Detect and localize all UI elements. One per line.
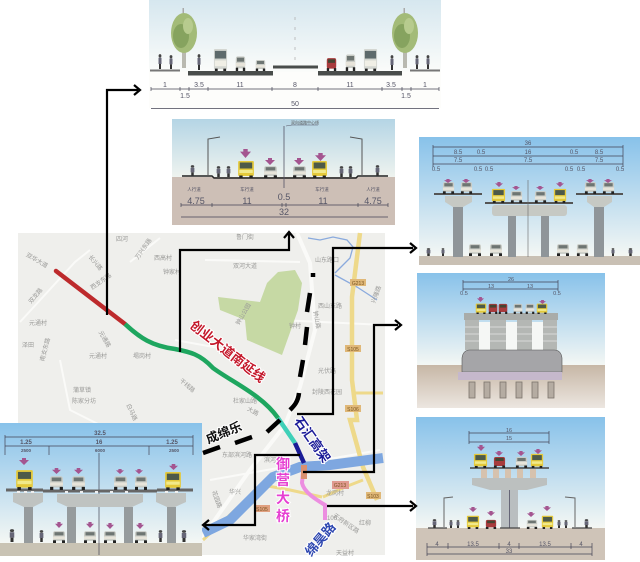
map place names: 元通路 <box>97 329 113 349</box>
dashed black rail line <box>203 273 313 453</box>
pedestrians <box>158 54 430 70</box>
centre line <box>284 119 319 188</box>
piers <box>24 507 176 543</box>
map place names: 山东路口 <box>315 256 339 264</box>
road shields: G213 <box>352 281 364 287</box>
map place names: 西山东路 <box>318 302 342 310</box>
dimensions: 7.5 <box>454 158 463 164</box>
map place names: 陈家分坊 <box>72 397 96 405</box>
dimensions: 16 <box>525 150 532 156</box>
dimensions top: 15 <box>506 436 512 442</box>
dimensions bottom: 4 <box>579 542 583 548</box>
panel: top road section <box>149 0 441 108</box>
dimensions: 7.5 <box>595 158 604 164</box>
vehicles <box>214 49 377 71</box>
dimensions: 人行道 <box>366 186 380 193</box>
expressway yellow roads <box>203 233 383 540</box>
label: bridge <box>276 456 290 524</box>
map place names: 光伏路 <box>318 367 336 375</box>
dimensions: 0.5 <box>570 150 579 156</box>
map place names: 兴隆路 <box>369 284 383 304</box>
dimensions: 人行道 <box>187 186 201 193</box>
columns <box>465 320 557 350</box>
dimensions: 7.5 <box>524 158 533 164</box>
label: bridge: 御 <box>276 456 290 472</box>
dimension lines: 3.5 <box>386 82 396 89</box>
pedestrians <box>191 165 379 177</box>
dimensions top: 16 <box>506 428 512 434</box>
map place names: 元通村 <box>29 319 47 327</box>
dimension lines: 1 <box>163 82 167 89</box>
label: bridge: 营 <box>276 472 290 488</box>
dimension lines: 11 <box>346 82 354 89</box>
dimensions: 0.5 <box>565 167 574 173</box>
dimensions: 车行道 <box>315 186 329 193</box>
dimensions: 0.5 <box>553 291 561 297</box>
dimensions <box>5 431 193 555</box>
dimensions: 8.5 <box>595 150 604 156</box>
lamps <box>444 497 575 527</box>
dimensions <box>460 277 561 297</box>
road deck line <box>182 176 388 178</box>
map place names: 天府新区路 <box>332 511 361 535</box>
dimensions: 11 <box>242 196 252 206</box>
panel: elevated section with side ramps <box>419 137 640 265</box>
dimensions: 1.25 <box>166 440 178 446</box>
dimensions: 36 <box>525 141 532 147</box>
green park area <box>218 270 302 355</box>
map place names: 东部滨河路 <box>222 451 252 459</box>
map place names: 干线路 <box>178 377 197 394</box>
dimensions: 0.5 <box>616 167 625 173</box>
map place names: 大路 <box>246 405 260 418</box>
lower vehicles <box>433 506 588 529</box>
upper vehicles <box>16 458 181 490</box>
dimension lines: 1.5 <box>401 93 411 100</box>
dimension lines: 1.5 <box>180 93 190 100</box>
lower vehicles <box>10 522 186 543</box>
panel: bottom-left elevated section <box>0 423 202 556</box>
map place names: 钟山公园 <box>234 302 253 326</box>
dimensions bottom <box>427 542 592 556</box>
dimensions: 0.5 <box>432 167 441 173</box>
base <box>462 350 562 372</box>
dimension lines: 11 <box>236 82 244 89</box>
map place names: 龙岗村 <box>326 489 344 497</box>
map place names: 四河 <box>116 235 128 243</box>
map place names: 封陵西花园 <box>312 388 342 396</box>
dimensions: 11 <box>318 196 328 206</box>
dimensions: 1.25 <box>20 440 32 446</box>
dimensions: 26 <box>508 277 514 283</box>
dimensions bottom: 4 <box>507 542 511 548</box>
map place names: 西高村 <box>154 254 172 262</box>
map place names: 杜家山路 <box>233 397 257 405</box>
road shields: S105 <box>256 507 268 513</box>
map place names: 长兴路 <box>87 253 104 272</box>
map place names: 西支东路 <box>89 271 113 292</box>
dimensions: 0.5 <box>474 167 483 173</box>
dimensions bottom: 33 <box>506 549 513 555</box>
dimensions: 32.5 <box>94 431 106 437</box>
dimensions: 0.5 <box>460 291 468 297</box>
map place names: 天益村 <box>336 549 354 557</box>
dimensions <box>181 186 388 217</box>
dimension lines: 1 <box>423 82 427 89</box>
map place names: 双河大道 <box>233 262 257 270</box>
cap beam <box>472 478 547 490</box>
panel: double-deck viaduct section <box>416 417 605 560</box>
road shields: S105 <box>347 347 359 353</box>
map place names: 红柳 <box>359 519 371 527</box>
icon: right tree <box>392 8 418 68</box>
arrow: to double-deck section <box>327 501 416 511</box>
dimensions bottom: 13.5 <box>539 542 551 548</box>
map place names: 滨河 <box>264 456 276 464</box>
map place names: 泽田 <box>22 341 34 349</box>
dimensions: 0.5 <box>577 167 586 173</box>
panel: at-grade section <box>172 119 395 225</box>
dimensions: 2500 <box>169 448 180 453</box>
caps <box>13 493 186 507</box>
label: bridge: 大 <box>276 490 290 506</box>
route: dark blue section <box>295 443 304 463</box>
map place names: 蒲草镇 <box>73 386 91 394</box>
dimensions: 4.75 <box>187 196 205 206</box>
map place names: 白马路 <box>124 402 139 422</box>
dimensions: 13 <box>488 284 494 290</box>
label: connecting road: 绵昊路 <box>302 520 339 559</box>
map place names: 钟家村 <box>163 268 181 276</box>
dimensions: 32 <box>279 207 289 217</box>
icon: left tree <box>171 8 197 68</box>
upper vehicles <box>474 445 543 468</box>
map place names: 钟村 <box>289 322 301 330</box>
map place names: 双华大道 <box>25 251 49 270</box>
road shields: S106 <box>347 407 359 413</box>
dimensions: 0.5 <box>278 192 290 202</box>
dimensions: 0.5 <box>485 167 494 173</box>
map place names: 元通村 <box>89 352 107 360</box>
map place names: 双龙路 <box>27 286 44 305</box>
road shields: G213 <box>334 483 346 489</box>
map place names: 华兴 <box>229 488 241 496</box>
map place names <box>22 233 383 557</box>
map place names: S106 <box>323 516 338 522</box>
label: railway: 成绵乐 <box>204 418 244 447</box>
map place names: 鲁门街 <box>236 233 254 241</box>
dimensions: 0.5 <box>477 150 486 156</box>
dimensions: 2500 <box>21 448 32 453</box>
map place names: 钟山路 <box>311 310 322 329</box>
vehicles lower <box>427 244 632 256</box>
river <box>203 458 383 533</box>
arrow: to top section <box>107 85 140 315</box>
column <box>501 489 518 528</box>
dimension lines: 3.5 <box>194 82 204 89</box>
route: red section <box>56 271 125 324</box>
stream <box>308 237 377 300</box>
decks <box>6 490 193 491</box>
dimensions <box>432 141 625 173</box>
dimensions: 8.5 <box>454 150 463 156</box>
dimension lines: 8 <box>293 82 297 89</box>
label: elevated road: 石汇高架 <box>291 414 333 465</box>
road surface <box>150 66 440 76</box>
arrow: to elevated section <box>297 243 416 414</box>
vehicles upper <box>443 179 614 203</box>
vehicles and arrows <box>238 149 327 178</box>
arrow: to bottom-left section <box>203 455 300 530</box>
dimensions: 13 <box>527 284 533 290</box>
panel: tunnel-style box section <box>417 273 605 408</box>
arrow: to box section <box>303 320 401 472</box>
label: bridge: 桥 <box>276 508 290 524</box>
dimensions: 6000 <box>95 448 106 453</box>
route: pink section <box>302 472 325 520</box>
panel: road plan map <box>18 233 385 559</box>
dimensions bottom: 4 <box>435 542 439 548</box>
dimension lines: 50 <box>291 101 299 108</box>
map place names: 埸岗村 <box>133 352 151 360</box>
structure: piers and decks <box>453 206 604 257</box>
dimensions top <box>469 428 549 444</box>
supports <box>481 469 536 478</box>
dimensions: 车行道 <box>240 186 254 193</box>
dimension lines <box>151 82 439 108</box>
arrow: to at-grade section <box>180 232 294 352</box>
road shields: S103 <box>367 494 379 500</box>
map place names: 万兴东路 <box>133 237 154 261</box>
bridge mark <box>301 465 307 479</box>
road shields <box>254 279 381 513</box>
dimensions: 4.75 <box>364 196 382 206</box>
map place names: 华家湾街 <box>243 534 267 542</box>
label: road name: 创业大道南延线 <box>187 317 268 385</box>
map place names: 花园路 <box>210 489 224 509</box>
map place names: 南支东路 <box>38 337 52 362</box>
route: green section <box>125 324 278 418</box>
centre axis <box>294 17 296 65</box>
piles <box>469 382 554 398</box>
route: teal section <box>278 418 295 443</box>
centre line: 双向道路中心线 <box>291 119 319 125</box>
vehicles <box>476 297 547 314</box>
street lamps <box>208 137 362 176</box>
dimensions bottom: 13.5 <box>467 542 479 548</box>
dimensions: 16 <box>96 440 103 446</box>
deck <box>464 313 558 320</box>
